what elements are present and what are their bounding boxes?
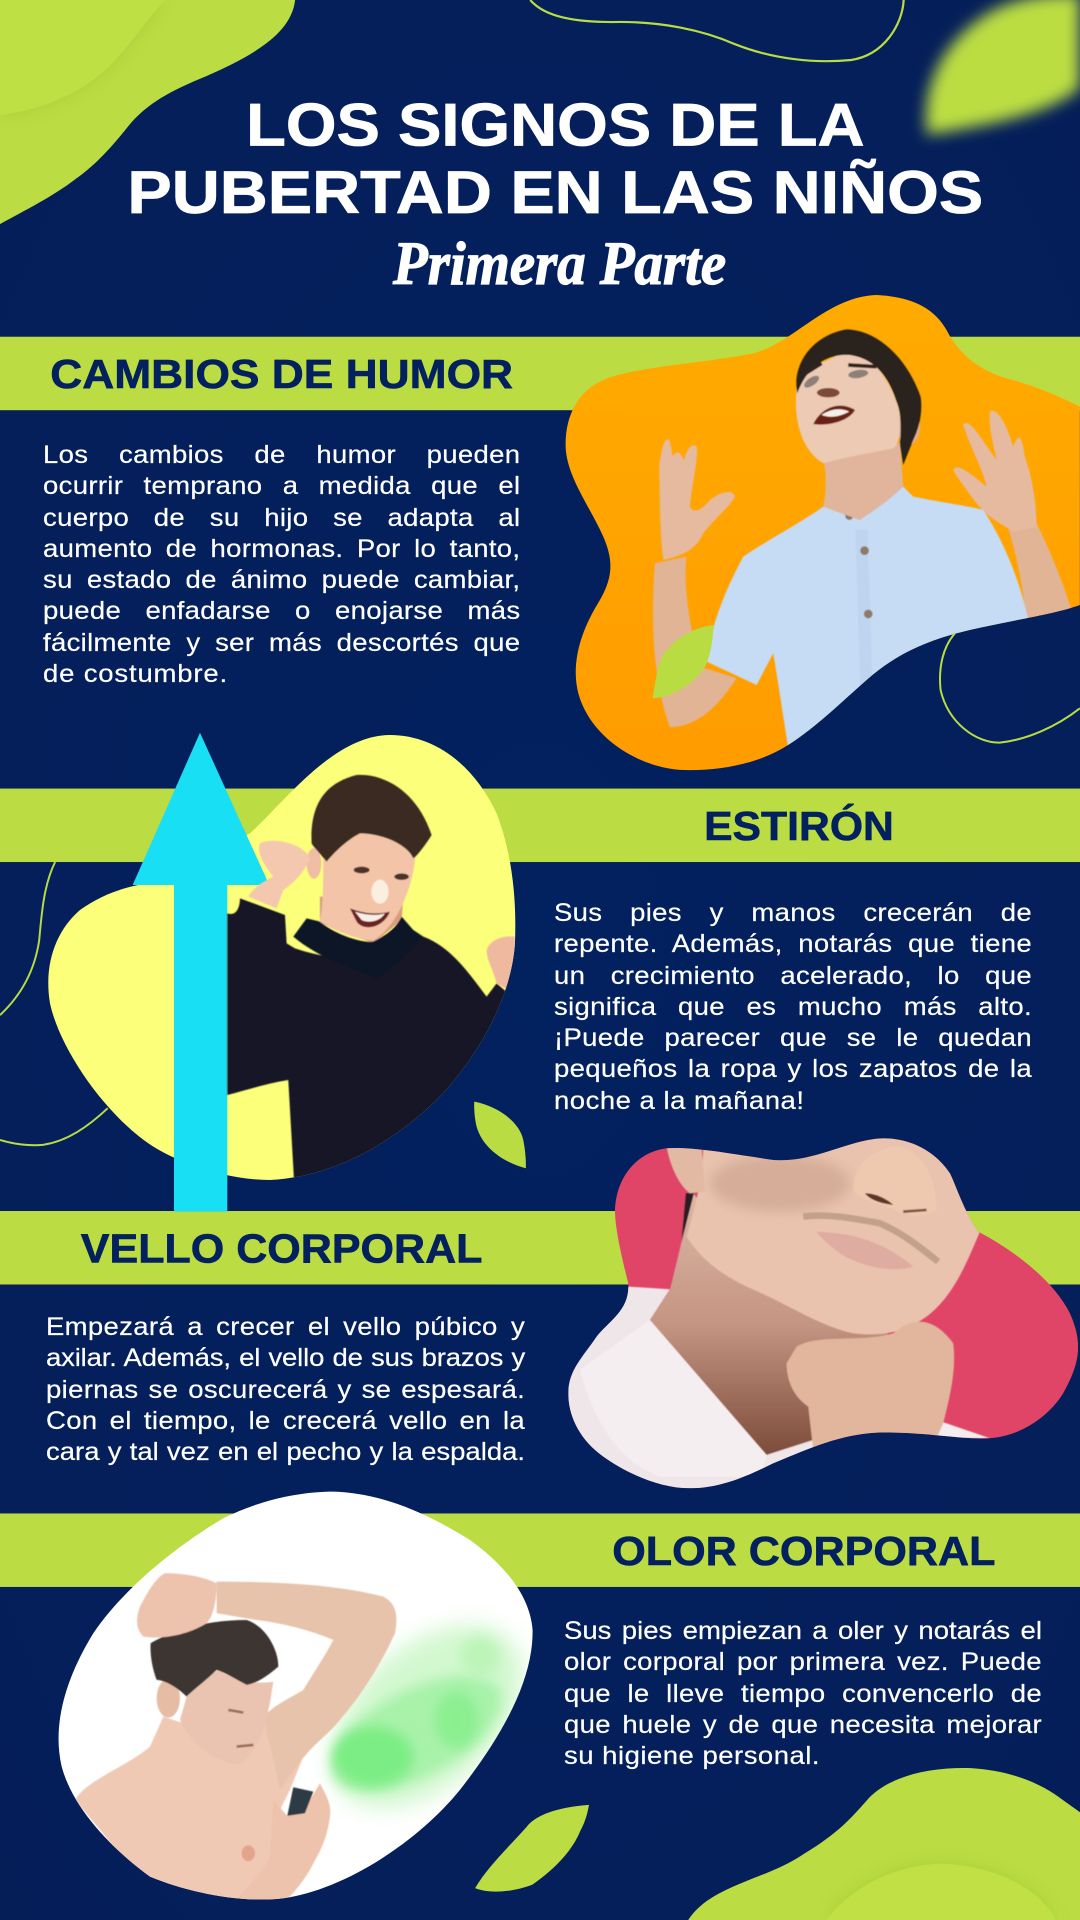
top-left green blob bbox=[0, 0, 295, 224]
shirt placket and buttons bbox=[862, 530, 867, 693]
photo: smiling boy on yellow blob with arrow bbox=[48, 733, 526, 1212]
text block: cambios de humor: ocurrir temprano a medida que el bbox=[43, 472, 520, 500]
leaf on arm bbox=[653, 625, 713, 698]
green band 4 bbox=[0, 1513, 1080, 1587]
neck bbox=[320, 897, 403, 943]
subtitle: Primera Parte bbox=[392, 230, 726, 298]
green odor cloud bbox=[320, 1616, 530, 1818]
text block: olor corporal: que huele y de que necesita mejorar bbox=[564, 1711, 1042, 1739]
ear bbox=[667, 1147, 705, 1193]
nose bbox=[854, 1178, 856, 1190]
hair bbox=[796, 329, 921, 465]
title: PUBERTAD EN LAS NIÑOS bbox=[127, 159, 983, 226]
text block: vello corporal: piernas se oscurecerá y se espesará. bbox=[46, 1376, 525, 1404]
lips bbox=[817, 1232, 913, 1269]
fist bbox=[137, 1573, 217, 1637]
text block: vello corporal: cara y tal vez en el pecho y la espalda. bbox=[46, 1438, 525, 1466]
hair bbox=[682, 1193, 694, 1242]
text block: cambios de humor: aumento de hormonas. Por lo tanto, bbox=[43, 535, 520, 563]
raised fist bbox=[248, 841, 310, 908]
fist bbox=[787, 1322, 954, 1450]
left hand bbox=[659, 439, 735, 560]
heading: estirón: ESTIRÓN bbox=[704, 803, 894, 849]
text block: vello corporal: axilar. Además, el vello de sus brazos y bbox=[46, 1344, 525, 1372]
ear bbox=[897, 408, 920, 445]
text block: cambios de humor: cuerpo de su hijo se adapta al bbox=[43, 504, 520, 532]
eyes bbox=[804, 375, 820, 388]
turtleneck bbox=[293, 917, 423, 978]
face bbox=[180, 1670, 273, 1765]
heading: olor corporal: OLOR CORPORAL bbox=[612, 1528, 996, 1574]
shirt bbox=[560, 1287, 813, 1497]
text block: olor corporal: su higiene personal. bbox=[564, 1742, 820, 1770]
text block: olor corporal: Sus pies empiezan a oler y notarás el bbox=[564, 1617, 1042, 1645]
right hand bbox=[953, 411, 1037, 532]
right fist bbox=[487, 936, 517, 990]
ear bbox=[157, 1679, 180, 1718]
heading: cambios de humor: CAMBIOS DE HUMOR bbox=[50, 351, 513, 397]
mouth bbox=[350, 908, 390, 927]
text block: cambios de humor: puede enfadarse o enojarse más bbox=[43, 597, 520, 625]
text block: estirón: repente. Además, notarás que tiene bbox=[554, 930, 1032, 958]
text block: estirón: ¡Puede parecer que se le quedan bbox=[554, 1024, 1032, 1052]
text block: cambios de humor bbox=[43, 441, 520, 688]
text block: cambios de humor: Los cambios de humor pueden bbox=[43, 441, 520, 469]
leaf bbox=[474, 1102, 526, 1168]
text block: olor corporal: que le lleve tiempo convencerlo de bbox=[564, 1680, 1042, 1708]
text block: estirón: noche a la mañana! bbox=[554, 1087, 804, 1115]
text block: vello corporal bbox=[46, 1313, 526, 1466]
deodorant bbox=[287, 1787, 313, 1816]
hand and forearm bbox=[233, 1783, 330, 1903]
top decorative curve bbox=[530, 0, 904, 61]
text block: estirón: pequeños la ropa y los zapatos de la bbox=[554, 1055, 1032, 1083]
neck bbox=[650, 1193, 893, 1455]
right shirt sliver bbox=[937, 1422, 990, 1438]
title bbox=[127, 92, 983, 226]
moustache bbox=[803, 1216, 938, 1262]
heading: vello corporal: VELLO CORPORAL bbox=[81, 1225, 482, 1271]
text block: vello corporal: Con el tiempo, le crecerá vello en la bbox=[46, 1407, 525, 1435]
ear bbox=[307, 848, 321, 879]
sweater bbox=[227, 898, 513, 1197]
text block: vello corporal: Empezará a crecer el vello púbico y bbox=[46, 1313, 525, 1341]
neck bbox=[823, 443, 903, 520]
nose bbox=[817, 388, 840, 397]
blurred leaf top right bbox=[926, 0, 1080, 135]
arrow bbox=[133, 733, 269, 1212]
text block: estirón: un crecimiento acelerado, lo que bbox=[554, 962, 1032, 990]
text block: cambios de humor: su estado de ánimo puede cambiar, bbox=[43, 566, 520, 594]
eyes bbox=[354, 867, 370, 873]
nipple bbox=[242, 1845, 255, 1861]
text block: estirón: Sus pies y manos crecerán de bbox=[554, 899, 1032, 927]
photo: boy with raised hands on orange blob bbox=[566, 295, 1080, 770]
bottom-right green blob bbox=[688, 1768, 1080, 1920]
left decorative curves bbox=[0, 862, 108, 1145]
green band 3 bbox=[0, 1211, 1080, 1284]
photo: boy spraying deodorant on white blob bbox=[59, 1492, 558, 1903]
left forearm and upper arm bbox=[653, 557, 737, 727]
text block: olor corporal: olor corporal por primera vez. Puede bbox=[564, 1648, 1042, 1676]
hair bbox=[311, 775, 432, 862]
face bbox=[319, 832, 416, 941]
curve beside wave bbox=[940, 633, 1080, 743]
closed eye and lips bbox=[228, 1710, 253, 1747]
text block: olor corporal bbox=[564, 1617, 1042, 1770]
arm bbox=[217, 1582, 396, 1790]
text block: cambios de humor: de costumbre. bbox=[43, 660, 228, 688]
photo: chin and moustache on pink blob bbox=[560, 1130, 1080, 1497]
text block: estirón: significa que es mucho más alto. bbox=[554, 993, 1032, 1021]
hair bbox=[151, 1620, 278, 1697]
shirt bbox=[707, 487, 1028, 748]
face bbox=[687, 1130, 980, 1334]
text block: estirón bbox=[554, 899, 1032, 1115]
face bbox=[796, 350, 900, 463]
leaf bottom centre bbox=[475, 1805, 589, 1892]
mouth bbox=[813, 406, 855, 425]
torso bbox=[75, 1717, 303, 1903]
title: LOS SIGNOS DE LA bbox=[246, 92, 864, 159]
green band 1 bbox=[0, 337, 1080, 410]
text block: cambios de humor: fácilmente y ser más descortés que bbox=[43, 629, 520, 657]
right forearm bbox=[1007, 523, 1072, 623]
green band 2 bbox=[0, 789, 1080, 862]
